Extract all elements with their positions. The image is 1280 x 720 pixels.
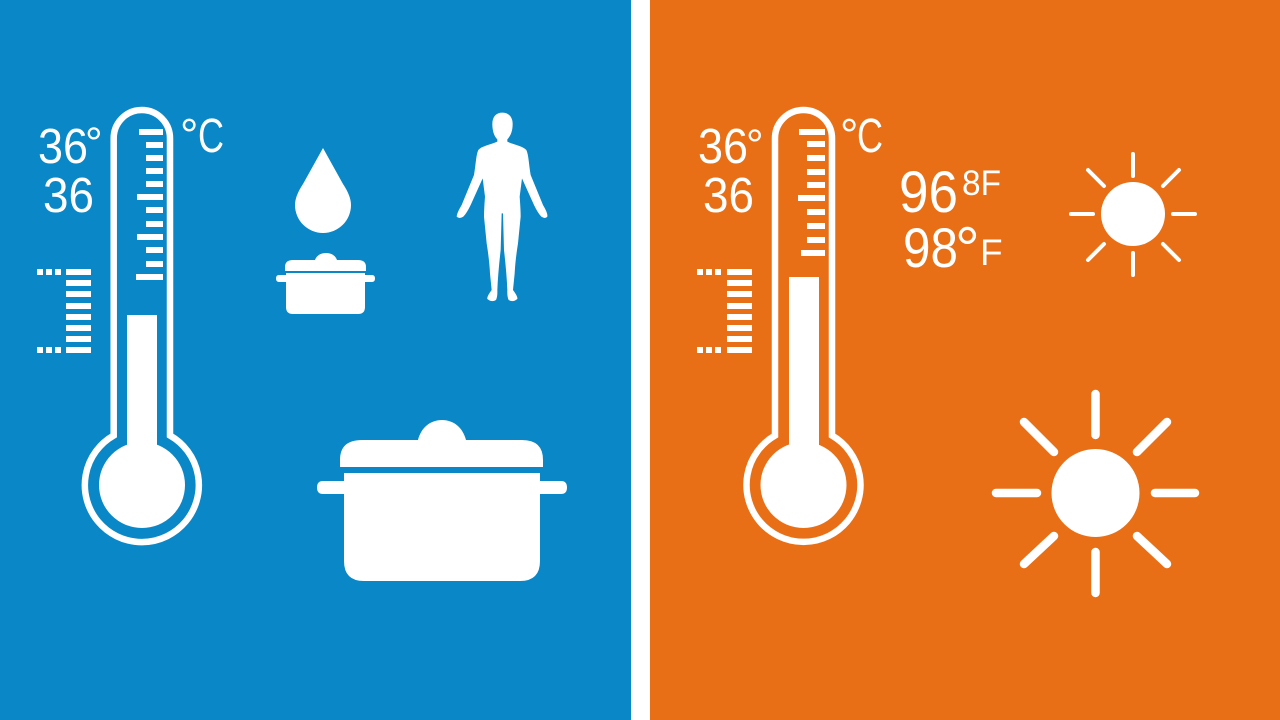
fahrenheit label: 96.8 F: 96 [899,160,958,225]
temperature labels: blue: ° [85,119,103,168]
icon: small sun [1071,154,1195,275]
fahrenheit label: 98 F [903,215,1003,284]
unit label: blue: ° [180,109,198,161]
scale ladder: blue [37,269,91,353]
unit label: orange: ° [840,109,858,161]
temperature labels: orange: ° [746,121,764,170]
icon: human figure [457,113,547,301]
thermometer: orange [746,110,860,542]
temperature labels: blue: 36 [43,169,94,223]
temperature labels: orange: 36 [698,120,748,174]
fahrenheit label: 98 F: 98 [903,216,958,279]
temperature labels: blue: 36 [38,120,88,174]
fahrenheit label: 96.8 F: 8F [962,164,1001,203]
thermometer: blue [85,110,199,542]
fahrenheit label: 96.8 F [899,160,1001,225]
scale ladder: orange [697,269,752,353]
icon: large sun [996,394,1195,593]
unit label: orange [840,109,883,163]
temperature labels: orange: 36 [703,169,754,223]
icon: water drop [295,148,351,233]
icon: small pot [276,253,375,314]
unit label: blue: C [198,110,224,163]
fahrenheit label: 98 F: ° [955,215,980,284]
temperature labels: blue [38,119,103,223]
unit label: blue [180,109,224,163]
unit label: orange: C [857,110,883,163]
panel: blue left [0,0,631,720]
panel: orange right [650,0,1280,720]
icon: large pot [317,420,567,581]
temperature labels: orange [698,120,764,223]
fahrenheit label: 98 F: F [980,232,1003,273]
